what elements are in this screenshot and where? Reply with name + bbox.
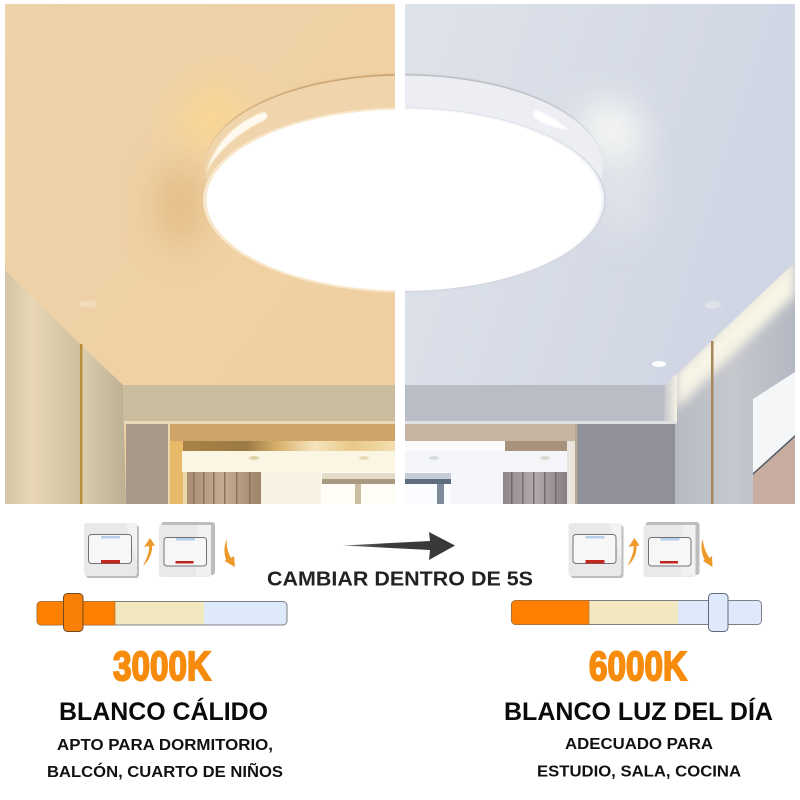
wall artwork <box>753 372 795 473</box>
slider knob, cool <box>708 594 728 632</box>
white ceiling soffit <box>182 451 395 472</box>
text: warm uses line 2: BALCÓN, CUARTO DE NIÑOS <box>47 763 283 781</box>
recessed ceiling spots <box>652 361 666 367</box>
heading: daylight white: BLANCO LUZ DEL DÍA <box>504 697 773 726</box>
window and sheer curtain <box>405 472 451 504</box>
icon: curved arrow down <box>701 539 712 567</box>
recessed ceiling spot <box>79 300 97 308</box>
white glow on ceiling <box>576 92 652 166</box>
dark wall panel <box>577 424 675 504</box>
white ceiling soffit <box>405 451 567 472</box>
switch: lower pressed <box>644 522 700 577</box>
left wall <box>5 270 81 504</box>
ring light slot <box>534 110 568 130</box>
text: warm uses line 1: APTO PARA DORMITORIO, <box>57 737 273 754</box>
panel: cool light photo <box>405 4 795 504</box>
lamp ring shadow edge <box>207 73 395 153</box>
gold wall strip <box>80 344 82 504</box>
text: daylight uses line 1: ADECUADO PARA <box>565 736 713 753</box>
curtain <box>503 472 567 504</box>
colour temperature slider, cool <box>512 594 762 632</box>
ceiling <box>405 4 795 385</box>
heading: warm white: BLANCO CÁLIDO <box>59 697 268 726</box>
ceiling lamp, cool half <box>405 74 606 292</box>
ring light slot <box>206 112 267 172</box>
ceiling lamp, warm half <box>203 73 395 292</box>
icon: curved arrow down <box>224 539 235 567</box>
lamp ring <box>205 76 395 180</box>
colour temperature slider, warm <box>37 594 287 632</box>
value: 6000K: 6000K <box>589 643 687 689</box>
switch: upper pressed <box>568 523 624 578</box>
lamp bezel <box>405 108 606 292</box>
gold frame <box>168 424 187 504</box>
panel: warm light photo <box>5 4 395 504</box>
value: 3000K: 3000K <box>113 643 211 689</box>
lamp glowing face <box>405 110 602 290</box>
switch: upper pressed <box>84 523 139 578</box>
wall light cove <box>676 255 795 410</box>
icon: curved arrow up <box>628 538 640 566</box>
frame <box>567 441 575 504</box>
lamp ring <box>405 76 603 179</box>
sheer curtain and window <box>261 472 321 504</box>
warm shadow below lamp <box>158 163 202 247</box>
switch: lower pressed <box>159 522 215 577</box>
slider knob, warm <box>64 594 83 632</box>
switch pair, right <box>568 522 712 578</box>
gold wall strip <box>711 341 714 504</box>
arrow: change direction <box>343 532 455 560</box>
lamp glowing face <box>206 110 395 290</box>
lamp ring shadow edge <box>405 74 600 152</box>
text: daylight uses line 2: ESTUDIO, SALA, COCINA <box>537 764 741 780</box>
ceiling beam <box>405 385 665 423</box>
icon: curved arrow up <box>143 538 155 566</box>
warm glow on ceiling <box>182 88 242 148</box>
ceiling beam <box>123 385 395 423</box>
switch pair, left <box>84 522 235 578</box>
dark wall panel <box>126 424 168 504</box>
right wall base <box>675 250 795 504</box>
curtain <box>187 472 261 504</box>
caption: change within 5 seconds: CAMBIAR DENTRO DE 5S <box>267 568 533 590</box>
lamp bezel <box>203 108 395 292</box>
